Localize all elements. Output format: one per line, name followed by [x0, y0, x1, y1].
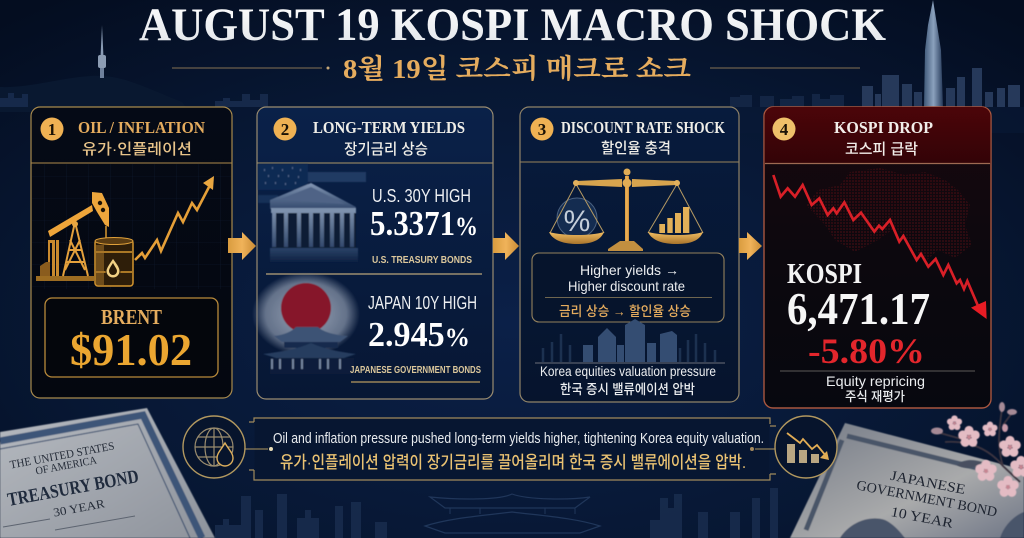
- panel: long-term yields: [252, 107, 493, 399]
- heading: oil / inflation: 유가·인플레이션: [82, 141, 192, 158]
- callout banner: 유가·인플레이션 압력이 장기금리를 끌어올리며 한국 증시 밸류에이션을 압박.: [280, 453, 746, 472]
- illustration: Japanese government bond: GOVERNMENT BOND: [855, 478, 998, 520]
- illustration: US treasury bond: TREASURY BOND: [6, 466, 140, 511]
- badge 3: 3: [538, 120, 546, 139]
- heading: long-term yields: 장기금리 상승: [344, 141, 428, 158]
- arrow 1: [228, 232, 256, 260]
- callout: higher yields: Higher discount rate: [568, 278, 685, 294]
- panel: oil / inflation: [31, 107, 232, 398]
- skyline: Namsan tower and hill: [0, 25, 268, 112]
- arrow 2: [493, 232, 519, 260]
- text: Japan 10Y yield: [350, 293, 481, 382]
- heading: oil / inflation: OIL / INFLATION: [78, 118, 206, 137]
- chart: falling KOSPI arrow: [773, 175, 987, 319]
- text: US 30Y yield: U.S. TREASURY BONDS: [372, 254, 472, 266]
- callout: brent price: [45, 298, 218, 377]
- illustration: Japanese government bond: [790, 423, 1024, 538]
- panel: KOSPI drop: [764, 107, 991, 408]
- text: KOSPI value: -5.80%: [808, 331, 925, 371]
- icon: oil pump: [36, 192, 109, 281]
- badge 1: 1: [48, 120, 56, 139]
- callout: brent price: $91.02: [70, 325, 192, 375]
- text: equity repricing: [826, 373, 925, 404]
- badge 4: 4: [780, 120, 789, 139]
- image: US treasury building and flag: [258, 164, 366, 262]
- panel: discount rate shock: [520, 107, 739, 402]
- callout banner: Oil and inflation pressure pushed long-term yields higher, tightening Korea equity valuation.: [273, 430, 764, 447]
- heading: discount rate shock: 할인율 충격: [601, 140, 671, 157]
- heading: long-term yields: [313, 118, 465, 158]
- icon: oil barrel: [95, 238, 133, 286]
- subtitle: [172, 54, 860, 84]
- illustration: US treasury bond: 30 YEAR: [52, 496, 106, 520]
- callout: higher yields: 금리 상승 → 할인율 상승: [559, 303, 691, 319]
- text: equity repricing: 주식 재평가: [845, 389, 905, 404]
- illustration: Japanese government bond: JAPANESE: [889, 469, 966, 498]
- callout: higher yields: [532, 253, 724, 322]
- text: KOSPI value: KOSPI: [787, 259, 862, 290]
- image: Japan sun and pagoda: [252, 272, 360, 374]
- arrow 3: [739, 232, 762, 260]
- illustration: US treasury bond: [0, 408, 215, 538]
- chart: rising price arrow: [135, 176, 214, 260]
- text: valuation pressure: 한국 증시 밸류에이션 압박: [560, 382, 695, 397]
- text: KOSPI value: [787, 259, 930, 371]
- badge 2: [274, 118, 296, 140]
- heading: discount rate shock: [561, 118, 726, 157]
- icon: balance scale: %: [564, 205, 590, 238]
- icon: balance scale: [549, 168, 703, 251]
- callout: higher yields: Higher yields →: [580, 262, 679, 278]
- heading: KOSPI drop: KOSPI DROP: [834, 118, 933, 137]
- text: Japan 10Y yield: JAPANESE GOVERNMENT BONDS: [350, 364, 481, 376]
- image: city and candlesticks: [535, 319, 725, 363]
- heading: KOSPI drop: 코스피 급락: [845, 141, 918, 158]
- text: Japan 10Y yield: 2.945%: [368, 315, 470, 354]
- skyline: Lotte tower and city: [730, 0, 1024, 133]
- illustration: US treasury bond: OF AMERICA: [35, 454, 98, 478]
- text: US 30Y yield: [370, 186, 478, 266]
- icon: falling bars: [775, 416, 837, 478]
- heading: discount rate shock: DISCOUNT RATE SHOCK: [561, 118, 726, 137]
- text: US 30Y yield: 5.3371%: [370, 204, 478, 243]
- text: KOSPI value: 6,471.17: [787, 284, 930, 334]
- text: valuation pressure: Korea equities valuation pressure: [540, 364, 716, 379]
- badge 2: 2: [281, 120, 289, 139]
- illustration: US treasury bond: THE UNITED STATES: [9, 440, 115, 472]
- subtitle: 8월 19일 코스피 매크로 쇼크: [343, 54, 691, 84]
- heading: long-term yields: LONG-TERM YIELDS: [313, 118, 465, 137]
- illustration: cherry blossoms: [931, 402, 1024, 497]
- badge 1: [40, 118, 64, 140]
- illustration: bottom skyline and palace: [215, 488, 778, 538]
- heading: oil / inflation: [78, 118, 206, 158]
- text: equity repricing: Equity repricing: [826, 373, 925, 389]
- badge 4: [772, 118, 796, 140]
- text: valuation pressure: [540, 364, 716, 397]
- badge 3: [530, 118, 554, 140]
- map texture: [806, 168, 972, 262]
- callout banner: [245, 418, 776, 480]
- icon: globe and oil drop: [183, 416, 245, 478]
- text: US 30Y yield: U.S. 30Y HIGH: [372, 186, 471, 206]
- title: AUGUST 19 KOSPI MACRO SHOCK: [139, 0, 886, 51]
- callout: brent price: BRENT: [101, 305, 162, 329]
- heading: KOSPI drop: [834, 118, 933, 158]
- text: Japan 10Y yield: JAPAN 10Y HIGH: [368, 293, 477, 313]
- illustration: Japanese government bond: 10 YEAR: [889, 505, 955, 532]
